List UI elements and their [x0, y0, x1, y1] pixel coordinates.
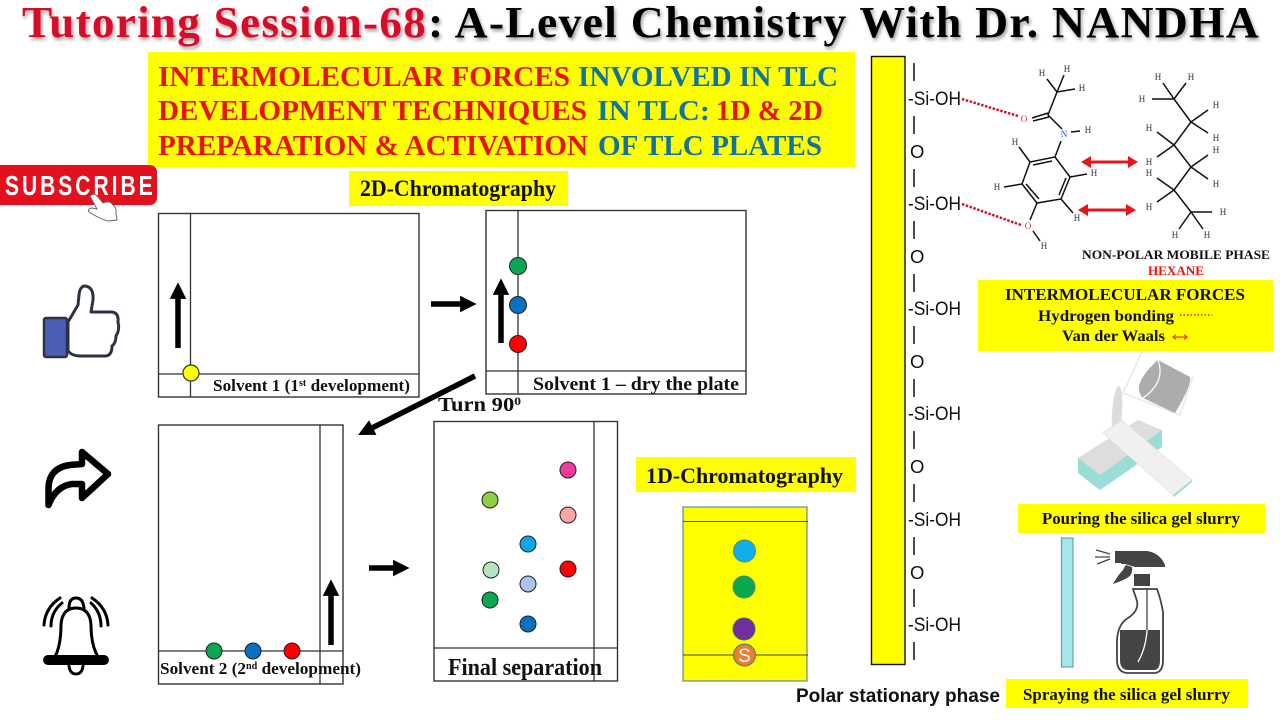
molecule: hexane: H — [1213, 145, 1220, 155]
pouring label: Pouring the silica gel slurry — [1042, 509, 1241, 528]
plate: second development — [158, 425, 361, 684]
icon: share arrow — [48, 452, 108, 505]
silica surface groups: O — [910, 351, 924, 372]
2D-chromatography heading — [349, 171, 568, 206]
molecule: hexane: H — [1146, 202, 1153, 212]
molecule: hexane: H — [1220, 207, 1227, 217]
silica surface groups — [908, 63, 961, 660]
plate: 1D chromatography — [683, 507, 808, 681]
hydrogen bonds — [962, 99, 1021, 225]
plate: second development: nd — [246, 661, 258, 672]
intermolecular forces legend: Hydrogen bonding — [1038, 308, 1174, 325]
mobile phase label — [1082, 247, 1270, 278]
arrow: solvent direction — [328, 586, 334, 645]
plate: 1D chromatography: S — [738, 646, 751, 667]
1D-chromatography heading: 1D-Chromatography — [646, 463, 843, 488]
subscribe button — [0, 165, 157, 221]
plate: final separation — [434, 421, 618, 681]
mobile phase label: NON-POLAR MOBILE PHASE — [1082, 247, 1270, 262]
plate: second development: development) — [257, 659, 361, 678]
molecule: hexane: H — [1204, 230, 1211, 240]
plate: dry the plate: Solvent 1 – dry the plate — [533, 374, 739, 395]
silica surface groups: O — [910, 562, 924, 583]
topics banner: DEVELOPMENT TECHNIQUES — [158, 95, 587, 127]
2D-chromatography heading: 2D-Chromatography — [360, 176, 556, 201]
molecule: hexane: H — [1213, 179, 1220, 189]
spraying label: Spraying the silica gel slurry — [1023, 685, 1231, 704]
molecule: paracetamol: H — [1039, 68, 1046, 78]
molecule: hexane: H — [1172, 230, 1179, 240]
plate: final separation: Final separation — [448, 655, 602, 681]
topics banner: INVOLVED IN TLC — [578, 61, 838, 93]
silica surface groups: -Si-OH — [908, 404, 961, 425]
silica surface groups: -Si-OH — [908, 89, 961, 110]
silica surface groups: O — [910, 246, 924, 267]
stationary phase label: Polar stationary phase — [796, 686, 1000, 707]
topics banner: 1D & 2D — [716, 95, 823, 127]
intermolecular forces legend: Van der Waals — [1062, 328, 1165, 345]
molecule: hexane — [1139, 72, 1227, 240]
plate: first development: st — [299, 378, 307, 389]
icon: thumbs up — [44, 286, 119, 357]
arrow: solvent direction — [498, 285, 504, 343]
icon: notification bell — [44, 598, 108, 674]
silica surface groups: -Si-OH — [908, 299, 961, 320]
molecule: paracetamol — [994, 64, 1098, 251]
glass plate — [1062, 538, 1073, 667]
molecule: hexane: H — [1188, 72, 1195, 82]
arrow: plate 3 to plate 4 — [369, 565, 403, 571]
plate: first development — [158, 213, 419, 397]
molecule: hexane: H — [1155, 72, 1162, 82]
stationary phase column — [872, 56, 905, 664]
turn label: Turn 90 — [438, 394, 506, 416]
topics banner: INTERMOLECULAR FORCES — [158, 61, 570, 93]
topics banner: PREPARATION & ACTIVATION — [158, 130, 588, 162]
molecule: paracetamol: O — [1025, 221, 1032, 231]
arrow: solvent direction — [175, 289, 181, 348]
molecule: hexane: H — [1146, 123, 1153, 133]
molecule: hexane: H — [1146, 168, 1153, 178]
plate: second development: Solvent 2 (2 — [160, 659, 245, 678]
intermolecular forces legend: INTERMOLECULAR FORCES — [1005, 285, 1245, 304]
topics banner — [148, 52, 855, 167]
subscribe button: SUBSCRIBE — [5, 171, 156, 202]
topics banner: OF TLC PLATES — [598, 130, 822, 162]
icon: pointing hand — [88, 194, 117, 221]
silica surface groups: -Si-OH — [908, 615, 961, 636]
plate: dry the plate — [486, 210, 746, 395]
title — [22, 0, 1260, 47]
plate: first development: development) — [306, 376, 410, 395]
molecule: paracetamol: H — [994, 182, 1001, 192]
molecule: hexane: H — [1146, 157, 1153, 167]
arrow: plate 1 to plate 2 — [431, 301, 470, 307]
molecule: hexane: H — [1213, 100, 1220, 110]
molecule: paracetamol: H — [1079, 83, 1086, 93]
molecule: hexane: H — [1213, 133, 1220, 143]
silica surface groups: -Si-OH — [908, 510, 961, 531]
arrow: turn plate — [364, 376, 475, 432]
turn label: 0 — [514, 394, 521, 408]
molecule: hexane: H — [1139, 94, 1146, 104]
silica surface groups: O — [910, 141, 924, 162]
intermolecular forces legend — [978, 280, 1273, 351]
pouring label — [1018, 504, 1265, 533]
molecule: paracetamol: H — [1085, 125, 1092, 135]
spraying label — [1006, 679, 1248, 708]
icon: spray bottle — [1095, 550, 1165, 673]
mobile phase label: HEXANE — [1148, 263, 1204, 278]
plate: first development: Solvent 1 (1 — [213, 376, 298, 395]
molecule: paracetamol: H — [1064, 64, 1071, 74]
topics banner: IN TLC: — [597, 95, 710, 127]
molecule: paracetamol: H — [1041, 241, 1048, 251]
molecule: paracetamol: H — [1074, 213, 1081, 223]
1D-chromatography heading — [636, 457, 856, 492]
molecule: paracetamol: N — [1061, 129, 1068, 139]
molecule: paracetamol: H — [1012, 137, 1019, 147]
silica surface groups: -Si-OH — [908, 194, 961, 215]
molecule: paracetamol: O — [1021, 114, 1028, 124]
icon: pouring slurry — [1078, 352, 1193, 497]
molecule: paracetamol: H — [1091, 168, 1098, 178]
van der Waals arrows — [1078, 156, 1138, 216]
silica surface groups: O — [910, 456, 924, 477]
